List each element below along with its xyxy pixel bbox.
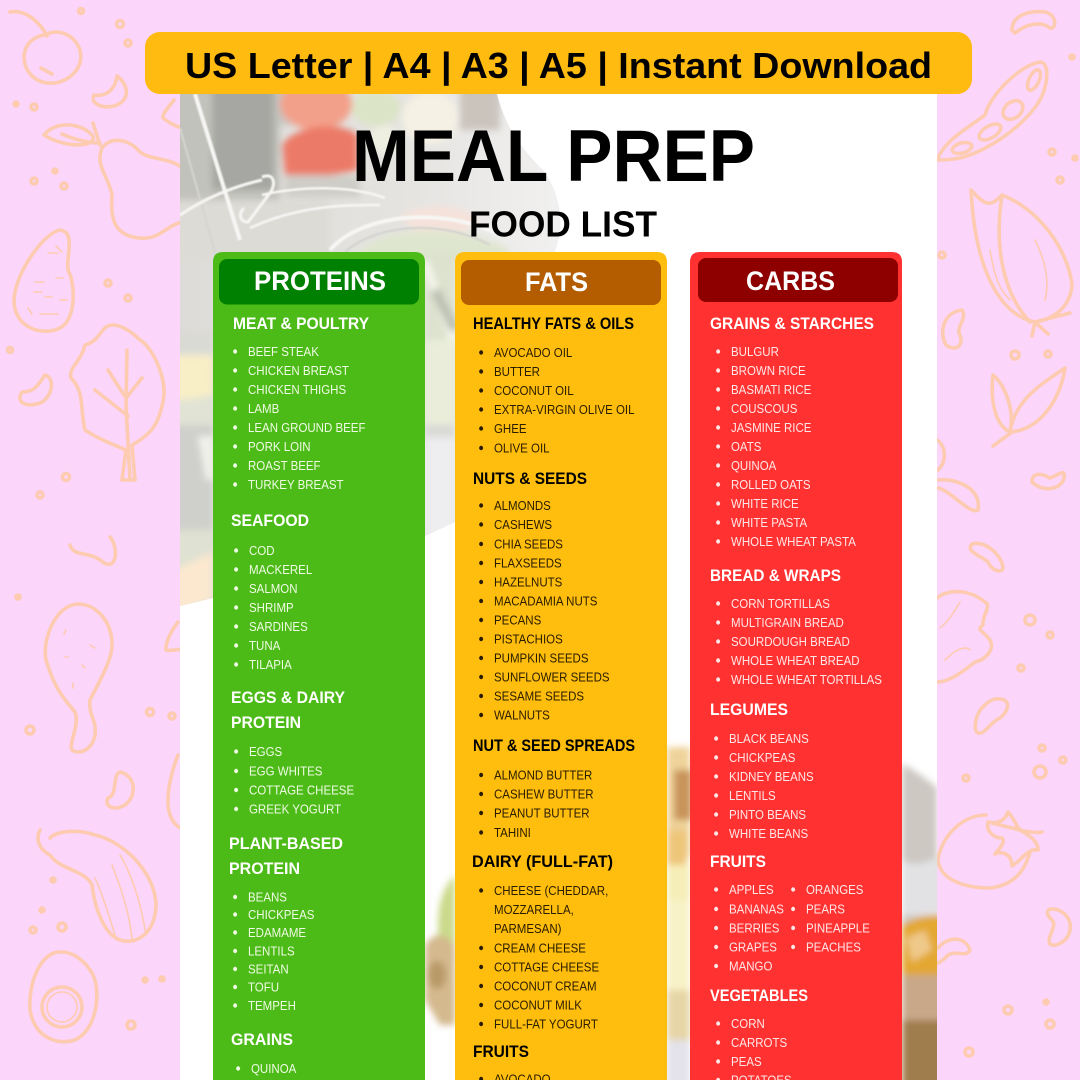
list: meat and poultry: TURKEY BREAST [248, 478, 344, 492]
heading: grains: GRAINS [231, 1031, 293, 1049]
list: nuts and seeds: PUMPKIN SEEDS [494, 651, 589, 666]
list: nuts and seeds: HAZELNUTS [494, 575, 562, 590]
panel: carbs [690, 252, 902, 1080]
list: carb fruits first column: GRAPES [729, 940, 777, 955]
list: vegetables: CARROTS [731, 1036, 787, 1050]
list: eggs and dairy: COTTAGE CHEESE [249, 783, 354, 798]
list: seafood: SALMON [249, 582, 298, 596]
list: grains and starches: ROLLED OATS [731, 478, 811, 492]
list: grains and starches: COUSCOUS [731, 402, 797, 416]
list: seafood: MACKEREL [249, 563, 313, 577]
list: carb fruits second column: PEARS [806, 902, 845, 917]
heading: vegetables: VEGETABLES [710, 987, 808, 1005]
list: carb fruits second column: PINEAPPLE [806, 921, 870, 936]
icon: pea pod [937, 62, 1047, 160]
list: meat and poultry: CHICKEN THIGHS [248, 383, 346, 397]
list: nuts and seeds: PECANS [494, 613, 541, 628]
photo: plate of food [425, 747, 945, 1080]
icon: bean far right [1047, 909, 1070, 945]
list: nuts and seeds [479, 499, 610, 723]
list: carb fruits second column [791, 883, 870, 955]
list: dairy: COCONUT MILK [494, 998, 582, 1013]
list: grains: QUINOA [251, 1062, 296, 1076]
list: healthy fats and oils: EXTRA-VIRGIN OLIVE OIL [494, 403, 635, 417]
icon: boiled egg [30, 952, 97, 1042]
list: grains and starches: WHOLE WHEAT PASTA [731, 535, 856, 549]
icon: drumstick [45, 604, 112, 752]
list: nut and seed spreads: PEANUT BUTTER [494, 806, 590, 821]
list: meat and poultry: BEEF STEAK [248, 345, 319, 359]
icon: apple [10, 12, 81, 83]
list: legumes: KIDNEY BEANS [729, 770, 814, 784]
list: meat and poultry: PORK LOIN [248, 440, 311, 454]
list: vegetables: PEAS [731, 1055, 762, 1069]
list: grains and starches [716, 345, 856, 549]
list: carb fruits second column: PEACHES [806, 940, 861, 955]
heading: grains and starches: GRAINS & STARCHES [710, 315, 874, 333]
icon: pear with leaf [44, 123, 182, 238]
list: eggs and dairy [234, 745, 354, 817]
list: dairy: FULL-FAT YOGURT [494, 1017, 598, 1032]
photo: meal prep jar [180, 94, 560, 606]
heading: nut and seed spreads: NUT & SEED SPREADS [473, 737, 635, 755]
list: carb fruits second column: ORANGES [806, 883, 863, 897]
list: grains and starches: BROWN RICE [731, 364, 806, 378]
list: grains and starches: JASMINE RICE [731, 421, 811, 435]
heading: bread and wraps: BREAD & WRAPS [710, 567, 841, 585]
heading: fats: FATS [525, 267, 588, 297]
list: bread and wraps: SOURDOUGH BREAD [731, 635, 850, 649]
list: legumes: WHITE BEANS [729, 827, 808, 841]
list: seafood: SARDINES [249, 620, 308, 634]
list: grains and starches: BASMATI RICE [731, 383, 811, 397]
heading: seafood: SEAFOOD [231, 512, 309, 530]
icon: sweet potato [14, 230, 73, 331]
list: nut and seed spreads: ALMOND BUTTER [494, 768, 593, 783]
list: carb fruits first column: BERRIES [729, 921, 779, 936]
list: grains and starches: WHITE RICE [731, 497, 799, 511]
panel: proteins [213, 252, 425, 1080]
icon: squash [38, 830, 156, 941]
icon: bean right top [1012, 12, 1055, 33]
list: plant-based: TOFU [248, 980, 279, 995]
list: healthy fats and oils: COCONUT OIL [494, 384, 574, 398]
list: carb fruits first column: MANGO [729, 959, 772, 974]
list: bread and wraps: MULTIGRAIN BREAD [731, 616, 844, 630]
heading: proteins [219, 259, 419, 304]
list: meat and poultry [233, 345, 365, 492]
heading: eggs and dairy protein: PROTEIN [231, 714, 301, 732]
heading: eggs and dairy protein [231, 689, 345, 732]
icon: cashew left top [93, 76, 126, 107]
icon: cashew left middle [20, 375, 51, 405]
list: plant-based: EDAMAME [248, 926, 306, 940]
list: bread and wraps: WHOLE WHEAT TORTILLAS [731, 673, 882, 687]
list: healthy fats and oils: OLIVE OIL [494, 441, 550, 456]
heading: fruits: FRUITS [473, 1043, 529, 1061]
heading: carbs [698, 258, 898, 302]
icon: almond [971, 190, 1072, 336]
list: eggs and dairy: GREEK YOGURT [249, 802, 342, 817]
heading: eggs and dairy protein: EGGS & DAIRY [231, 689, 345, 707]
list: seafood: TUNA [249, 639, 280, 653]
list: nuts and seeds: SESAME SEEDS [494, 689, 584, 704]
list: dairy: COCONUT CREAM [494, 979, 597, 994]
list: nuts and seeds: ALMONDS [494, 499, 551, 513]
list: dairy [479, 884, 608, 1032]
icon: bean small [1032, 473, 1064, 489]
list: legumes: CHICKPEAS [729, 751, 795, 765]
heading: plant-based protein [229, 835, 343, 878]
list: nuts and seeds: PISTACHIOS [494, 632, 563, 647]
list: carb fruits first column: BANANAS [729, 902, 784, 917]
heading: meat and poultry: MEAT & POULTRY [233, 315, 369, 333]
banner: US Letter | A4 | A3 | A5 | Instant Download [185, 45, 932, 87]
list: bread and wraps: CORN TORTILLAS [731, 597, 830, 611]
list: plant-based: LENTILS [248, 944, 295, 959]
list: seafood [234, 544, 313, 672]
list: nuts and seeds: SUNFLOWER SEEDS [494, 670, 610, 685]
heading: plant-based protein: PLANT-BASED [229, 835, 343, 853]
list: seafood: SHRIMP [249, 601, 294, 615]
list: meat and poultry: LAMB [248, 402, 279, 416]
list: dairy: MOZZARELLA, [494, 903, 574, 917]
list: dairy: CHEESE (CHEDDAR, [494, 884, 608, 898]
list: grains and starches: WHITE PASTA [731, 516, 807, 530]
list: meat and poultry: CHICKEN BREAST [248, 364, 350, 378]
icon: cashew left lower [70, 537, 115, 564]
list: bread and wraps: WHOLE WHEAT BREAD [731, 654, 860, 668]
title: MEAL PREP [352, 116, 755, 197]
list: dairy: PARMESAN) [494, 922, 561, 936]
heading: carb fruits: FRUITS [710, 853, 766, 871]
icon: cashew edge [938, 939, 970, 963]
list: legumes: PINTO BEANS [729, 808, 806, 822]
icon: cherry top edge [163, 100, 182, 128]
list: plant-based: CHICKPEAS [248, 908, 314, 922]
heading: fats [461, 260, 661, 305]
icon: bean right middle [943, 310, 964, 348]
list: nuts and seeds: MACADAMIA NUTS [494, 594, 597, 609]
banner [145, 32, 972, 94]
heading: carbs: CARBS [746, 266, 835, 296]
heading: proteins: PROTEINS [254, 266, 386, 296]
icon: kale leaf [71, 325, 164, 480]
list: eggs and dairy: EGGS [249, 745, 282, 759]
list: nuts and seeds: CHIA SEEDS [494, 537, 563, 552]
list: dairy: CREAM CHEESE [494, 941, 586, 956]
list: nuts and seeds: CASHEWS [494, 518, 552, 532]
icon: bean [107, 772, 133, 808]
list: healthy fats and oils [479, 346, 635, 456]
list: nut and seed spreads [479, 768, 594, 840]
list: healthy fats and oils: GHEE [494, 422, 527, 436]
list: seafood: TILAPIA [249, 658, 292, 672]
heading: dairy full-fat: DAIRY (FULL-FAT) [472, 853, 613, 871]
paper background [180, 94, 937, 1080]
list: healthy fats and oils: AVOCADO OIL [494, 346, 573, 360]
icon: leaves [992, 368, 1065, 446]
list: grains and starches: BULGUR [731, 345, 779, 359]
list: nut and seed spreads: TAHINI [494, 826, 531, 840]
list: vegetables: CORN [731, 1017, 765, 1031]
list: seafood: COD [249, 544, 275, 558]
panel: fats [455, 252, 667, 1080]
icon: cashew lower right [970, 543, 1003, 571]
icon: strawberry [938, 812, 1042, 888]
list: carb fruits first column: APPLES [729, 883, 774, 897]
list: nuts and seeds: FLAXSEEDS [494, 556, 562, 571]
icon: partial bean [937, 440, 978, 511]
heading: plant-based protein: PROTEIN [229, 860, 300, 878]
icon: lettuce [937, 592, 991, 682]
heading: nuts and seeds: NUTS & SEEDS [473, 470, 587, 488]
list: eggs and dairy: EGG WHITES [249, 764, 322, 779]
list: grains and starches: OATS [731, 440, 761, 454]
list: grains and starches: QUINOA [731, 459, 776, 473]
list: plant-based: TEMPEH [248, 999, 296, 1013]
list: nuts and seeds: WALNUTS [494, 708, 550, 723]
list: meat and poultry: ROAST BEEF [248, 459, 321, 473]
subtitle: FOOD LIST [469, 204, 657, 244]
heading: legumes: LEGUMES [710, 701, 788, 719]
list: legumes: BLACK BEANS [729, 732, 809, 746]
list: healthy fats and oils: BUTTER [494, 365, 540, 379]
list: legumes [714, 732, 814, 841]
list: plant-based [233, 890, 314, 1013]
icon: bean lower right [975, 699, 1008, 733]
list: carb fruits first column [714, 883, 784, 974]
list: vegetables [716, 1017, 792, 1080]
list: plant-based: BEANS [248, 890, 287, 905]
list: bread and wraps [716, 597, 882, 687]
list: meat and poultry: LEAN GROUND BEEF [248, 421, 365, 435]
heading: healthy fats and oils: HEALTHY FATS & OILS [473, 315, 634, 333]
list: legumes: LENTILS [729, 789, 776, 803]
list: nut and seed spreads: CASHEW BUTTER [494, 787, 594, 802]
list: plant-based: SEITAN [248, 962, 289, 977]
list: dairy: COTTAGE CHEESE [494, 960, 599, 975]
